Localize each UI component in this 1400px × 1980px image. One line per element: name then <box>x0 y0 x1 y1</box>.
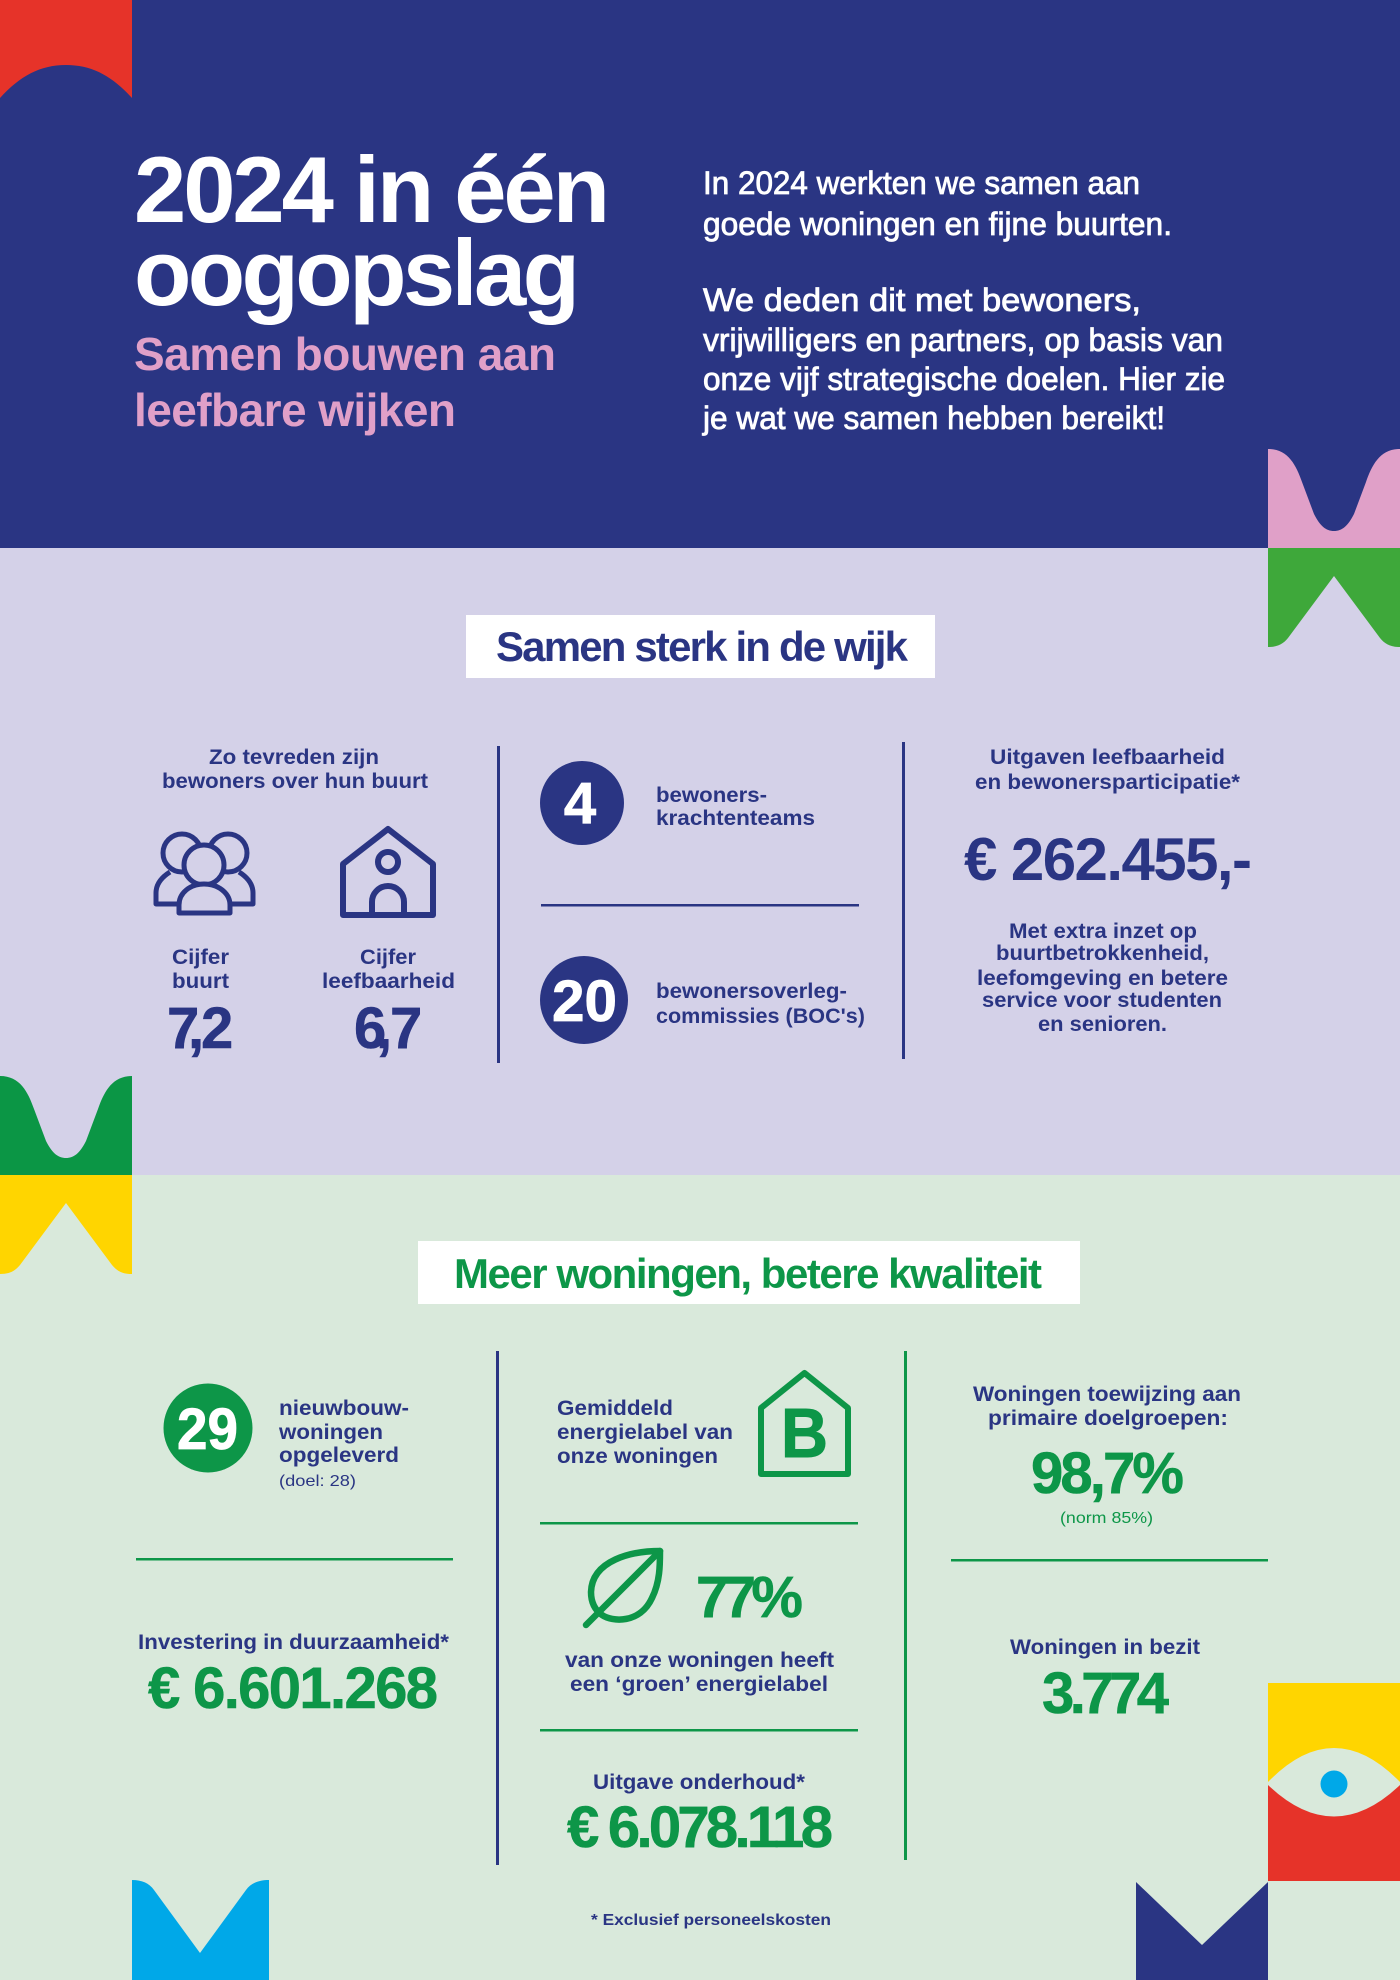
stat: groen energielabel: van onze woningen heeft <box>565 1649 834 1672</box>
score: leefbaarheid <box>322 946 455 1061</box>
satisfaction heading <box>162 746 428 793</box>
stat: bewonersoverlegcommissies: bewonersoverleg- <box>656 980 847 1003</box>
stat: uitgaven leefbaarheid <box>964 746 1252 1036</box>
stat: uitgaven leefbaarheid: leefomgeving en betere <box>977 967 1228 990</box>
panel: meer woningen, betere kwaliteit <box>0 1175 1400 1980</box>
stat: nieuwbouwwoningen: 29 <box>177 1397 238 1462</box>
intro text: vrijwilligers en partners, op basis van <box>703 322 1223 358</box>
stat: uitgaven leefbaarheid: en bewonersparticipatie* <box>975 771 1241 794</box>
score: buurt: Cijfer <box>172 946 229 969</box>
intro text: onze vijf strategische doelen. Hier zie <box>703 361 1225 397</box>
stat: woningen in bezit: 3.774 <box>1042 1661 1169 1726</box>
satisfaction heading: bewoners over hun buurt <box>162 770 428 793</box>
section heading: Samen sterk in de wijk <box>496 623 909 670</box>
stat: gemiddeld energielabel: energielabel van <box>557 1421 733 1444</box>
stat: woningen toewijzing <box>973 1383 1241 1527</box>
stat: investering duurzaamheid <box>138 1631 450 1721</box>
stat: nieuwbouwwoningen: nieuwbouw- <box>279 1397 409 1420</box>
stat: uitgave onderhoud: Uitgave onderhoud* <box>593 1771 806 1794</box>
score: leefbaarheid: Cijfer <box>360 946 416 969</box>
stat: woningen toewijzing: 98,7% <box>1031 1441 1184 1506</box>
stat: bewonersoverlegcommissies: commissies (BOC's) <box>656 1005 865 1028</box>
stat: uitgaven leefbaarheid: en senioren. <box>1038 1013 1167 1036</box>
icon: house label B <box>761 1373 848 1474</box>
stat: bewonerskrachtenteams: krachtenteams <box>656 807 815 830</box>
stat: woningen in bezit <box>1010 1636 1200 1726</box>
stat: gemiddeld energielabel: Gemiddeld <box>557 1397 673 1420</box>
title: oogopslag <box>134 220 580 325</box>
stat: nieuwbouwwoningen: woningen <box>278 1421 383 1444</box>
score: buurt <box>167 946 233 1061</box>
score: leefbaarheid: leefbaarheid <box>322 970 455 993</box>
satisfaction heading: Zo tevreden zijn <box>209 746 379 769</box>
icon: house <box>343 829 433 915</box>
stat: uitgaven leefbaarheid: Met extra inzet op <box>1009 920 1197 943</box>
score: buurt: 7,2 <box>167 996 233 1061</box>
shape: green and yellow left <box>0 1076 132 1274</box>
stat: gemiddeld energielabel: onze woningen <box>557 1445 718 1468</box>
stat: groen energielabel: een ‘groen’ energielabel <box>570 1673 828 1696</box>
stat: investering duurzaamheid: Investering in duurzaamheid* <box>138 1631 450 1654</box>
icon: people <box>156 834 253 913</box>
shape: eye <box>1268 1683 1400 1881</box>
subtitle <box>134 328 556 436</box>
satisfaction block <box>156 746 455 1061</box>
stat: groen energielabel <box>565 1551 834 1696</box>
section heading: Meer woningen, betere kwaliteit <box>454 1250 1042 1297</box>
icon: house label B: B <box>781 1394 828 1472</box>
footnote: * Exclusief personeelskosten <box>591 1912 831 1929</box>
stat: gemiddeld energielabel <box>557 1373 848 1474</box>
stat: woningen toewijzing: primaire doelgroepen: <box>988 1407 1228 1430</box>
stat: bewonerskrachtenteams: bewoners- <box>656 784 767 807</box>
panel: samen sterk in de wijk <box>0 548 1400 1175</box>
stat: bewonersoverlegcommissies <box>540 956 865 1044</box>
intro text: je wat we samen hebben bereikt! <box>702 400 1165 436</box>
stat: uitgaven leefbaarheid: buurtbetrokkenheid, <box>996 942 1209 965</box>
section heading <box>418 1241 1080 1304</box>
intro text: goede woningen en fijne buurten. <box>703 206 1172 242</box>
stat: uitgaven leefbaarheid: Uitgaven leefbaarheid <box>990 746 1225 769</box>
shape: navy M bottom <box>1136 1882 1268 1980</box>
title <box>134 137 610 325</box>
stat: uitgaven leefbaarheid: € 262.455,- <box>964 826 1252 893</box>
section heading <box>466 615 935 678</box>
stat: bewonerskrachtenteams <box>540 761 815 845</box>
subtitle: Samen bouwen aan <box>134 328 556 380</box>
shape: blue M bottom <box>132 1880 269 1980</box>
stat: woningen in bezit: Woningen in bezit <box>1010 1636 1200 1659</box>
panel: intro header <box>0 0 1400 548</box>
intro text: We deden dit met bewoners, <box>703 282 1141 318</box>
stat: nieuwbouwwoningen: (doel: 28) <box>279 1473 356 1490</box>
stat: bewonerskrachtenteams: 4 <box>564 771 596 836</box>
stat: woningen toewijzing: (norm 85%) <box>1060 1510 1153 1527</box>
stat: nieuwbouwwoningen <box>164 1384 409 1490</box>
stat: uitgave onderhoud: € 6.078.118 <box>567 1795 833 1860</box>
stat: bewonersoverlegcommissies: 20 <box>552 969 617 1034</box>
stat: investering duurzaamheid: € 6.601.268 <box>148 1656 438 1721</box>
score: buurt: buurt <box>172 970 229 993</box>
shape: pink and green right <box>1268 449 1400 647</box>
stat: nieuwbouwwoningen: opgeleverd <box>279 1444 399 1467</box>
stat: uitgaven leefbaarheid: service voor studenten <box>982 989 1222 1012</box>
icon: leaf <box>586 1551 660 1625</box>
title: 2024 in één <box>134 137 610 242</box>
stat: woningen toewijzing: Woningen toewijzing aan <box>973 1383 1241 1406</box>
intro text <box>702 165 1225 436</box>
shape: red arch top left <box>0 0 132 98</box>
subtitle: leefbare wijken <box>134 384 456 436</box>
intro text: In 2024 werkten we samen aan <box>703 165 1140 201</box>
stat: groen energielabel: 77% <box>696 1565 803 1630</box>
score: leefbaarheid: 6,7 <box>354 996 422 1061</box>
